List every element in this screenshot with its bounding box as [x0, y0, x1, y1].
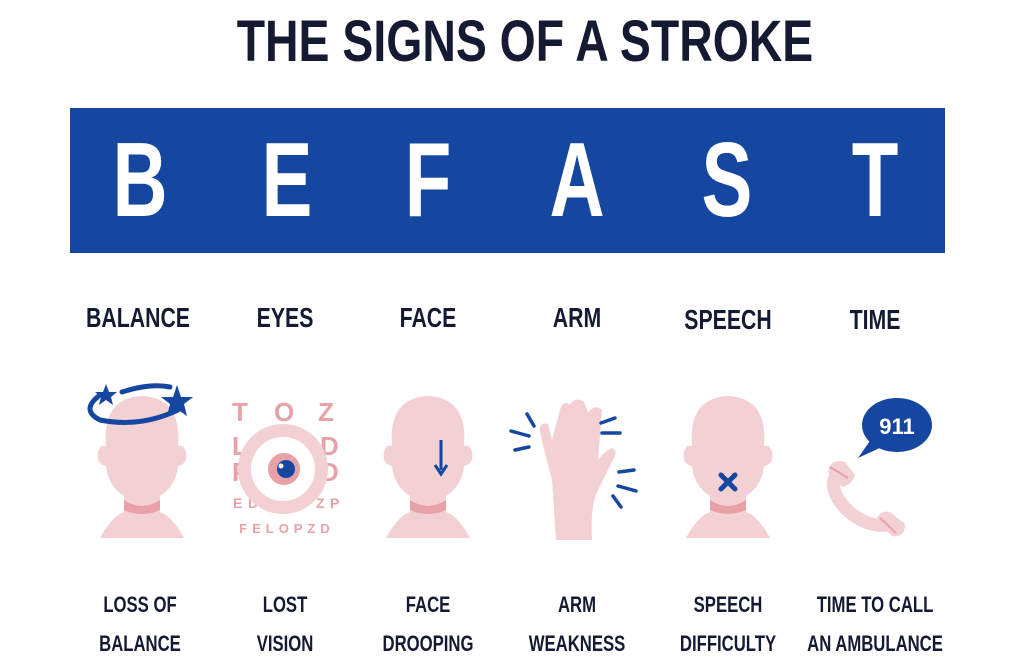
category labels: BALANCE [86, 302, 190, 334]
captions: DIFFICULTY [680, 632, 776, 657]
banner: BEFAST: T [852, 120, 898, 239]
icon: arm weakness hand [511, 400, 636, 540]
banner: BEFAST: B [112, 120, 168, 239]
icon: eye chart: E [233, 495, 242, 511]
captions: FACE [406, 593, 450, 618]
icon: eye chart [232, 397, 339, 536]
icon: eye chart: P [330, 495, 339, 511]
icon: eye chart: D [248, 495, 258, 511]
captions: LOST [263, 593, 307, 618]
captions: LOSS OF [103, 593, 177, 618]
banner: BEFAST: S [702, 120, 752, 239]
captions: WEAKNESS [529, 632, 625, 657]
icon: eye chart: Z [318, 397, 334, 427]
banner: BEFAST: E [262, 120, 312, 239]
icon: eye chart: Z [316, 495, 325, 511]
captions: AN AMBULANCE [807, 632, 943, 657]
category labels: ARM [553, 302, 601, 334]
captions: DROOPING [383, 632, 473, 657]
icon: eye chart: FELOPZD [239, 521, 335, 536]
banner: BEFAST: F [405, 120, 451, 239]
category labels: FACE [400, 302, 456, 334]
captions: ARM [558, 593, 596, 618]
captions [99, 593, 943, 657]
icon: eye chart: D [320, 431, 339, 461]
icon: phone with 911 bubble: 911 [879, 414, 915, 439]
icon: eye chart: O [274, 397, 294, 427]
icon: eye chart: P [232, 457, 249, 487]
icon: balance head with stars [90, 384, 193, 538]
icon: eye chart: L [232, 431, 248, 461]
category labels: TIME [850, 304, 900, 336]
captions: SPEECH [694, 593, 762, 618]
icon: eye chart: T [232, 397, 248, 427]
banner: BEFAST [70, 108, 945, 253]
captions: BALANCE [99, 632, 181, 657]
icon: eye chart: D [320, 457, 339, 487]
category labels: EYES [257, 302, 313, 334]
title: THE SIGNS OF A STROKE [237, 9, 813, 74]
banner: BEFAST: A [549, 120, 605, 239]
captions: VISION [257, 632, 313, 657]
icon: face drooping [384, 396, 472, 538]
icon: phone with 911 bubble [828, 398, 932, 536]
icon: speech difficulty head [684, 396, 772, 538]
category labels [86, 302, 900, 336]
captions: TIME TO CALL [817, 593, 933, 618]
category labels: SPEECH [684, 304, 772, 336]
